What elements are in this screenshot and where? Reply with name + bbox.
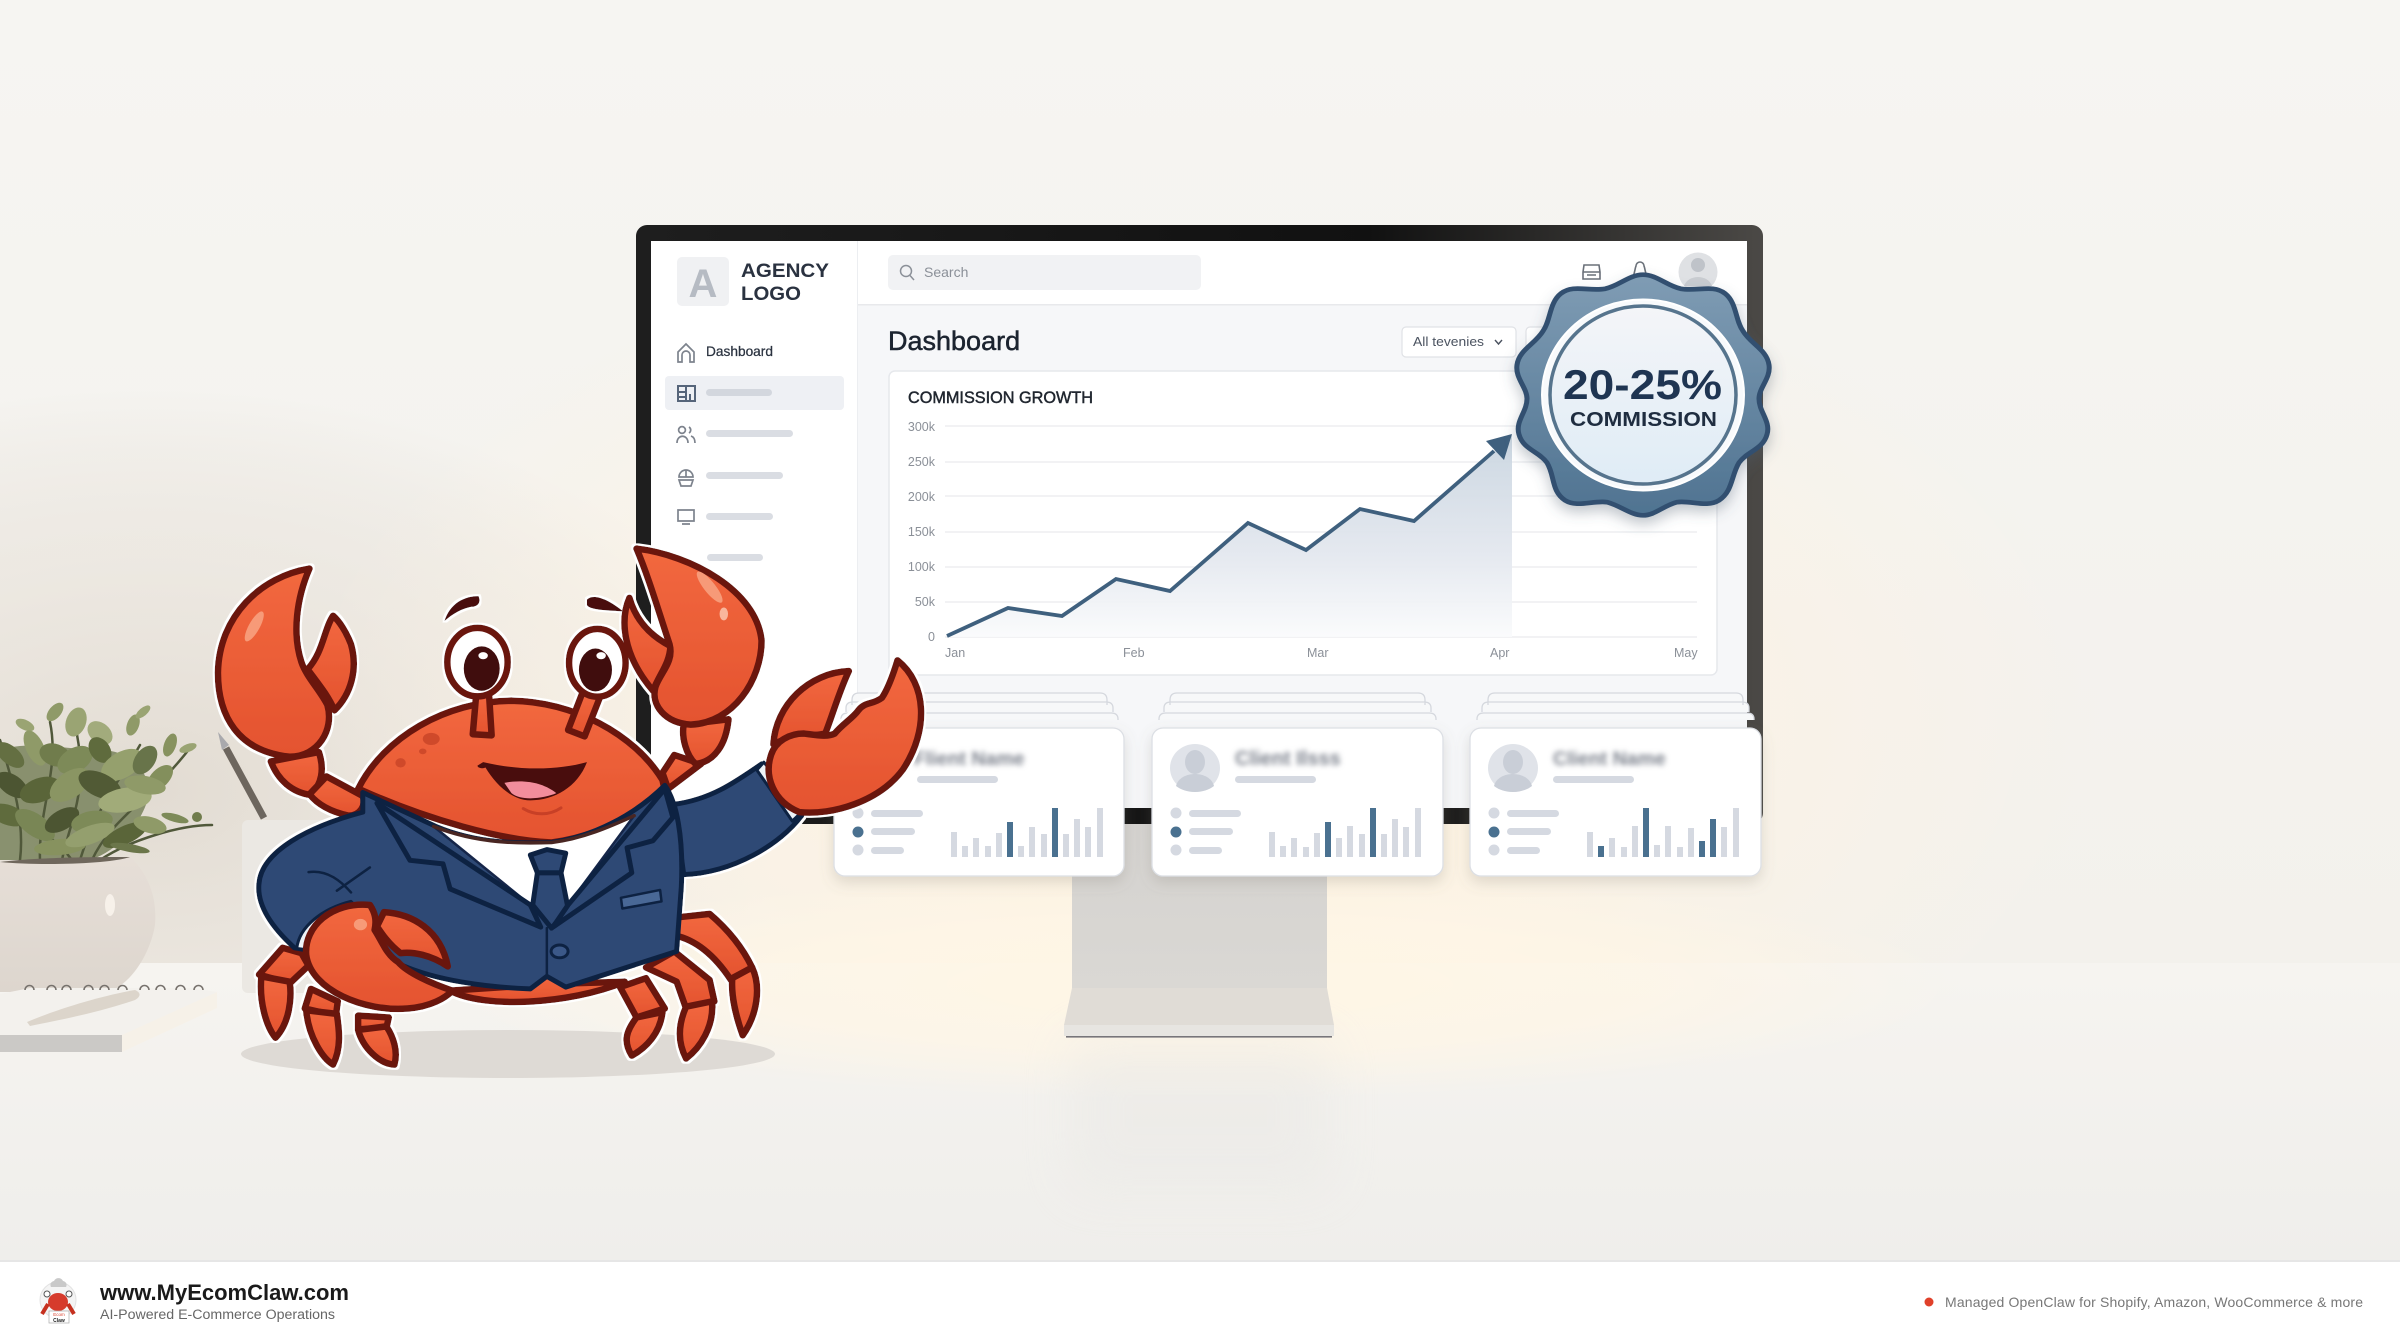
client stats list [1488, 808, 1559, 856]
plant stems [0, 722, 212, 860]
commission badge [1517, 275, 1769, 515]
search box [888, 255, 1201, 290]
icon: bell [1633, 262, 1647, 277]
crab front claw [297, 901, 452, 1009]
crab eyebrows [444, 596, 623, 621]
client name (blurred): Client Ilsss [1235, 748, 1341, 770]
crab left eye [447, 628, 508, 696]
client name (blurred): Client Name [1553, 748, 1666, 770]
client bar chart [951, 808, 1103, 857]
client bar chart [1587, 808, 1739, 857]
crab shell [358, 701, 665, 842]
growth line [947, 451, 1494, 636]
x axis labels: Mar [1307, 646, 1329, 660]
plant in pot [0, 700, 212, 992]
avatar [1678, 252, 1718, 292]
crab mascot [218, 549, 921, 1065]
footer logo [40, 1278, 76, 1324]
y axis labels: 150k [908, 525, 936, 539]
y axis labels: 0 [928, 630, 935, 644]
footer note: Managed OpenClaw for Shopify, Amazon, WooCommerce & more [1945, 1294, 2363, 1310]
crab mouth [477, 762, 587, 814]
sidebar [651, 241, 858, 808]
x axis labels: Jan [945, 646, 965, 660]
footer bar [0, 1260, 2400, 1340]
y axis labels: 250k [908, 455, 936, 469]
plant foliage mass [0, 746, 150, 860]
nav: reports [679, 470, 783, 486]
crab lapels [377, 803, 541, 927]
heading: dashboard: Dashboard [888, 326, 1020, 356]
y axis labels: 50k [915, 595, 936, 609]
filter dropdown [1402, 327, 1516, 357]
arrow head [1486, 434, 1512, 460]
y axis labels: 200k [908, 490, 936, 504]
plant leaves [0, 700, 202, 857]
agency logo: AGENCY [741, 260, 829, 282]
badge value: 20-25% [1563, 361, 1722, 408]
agency logo: LOGO [741, 283, 801, 305]
footer logo: Claw [53, 1318, 65, 1324]
crab button [551, 945, 568, 958]
x axis labels: May [1674, 646, 1698, 660]
footer red dot [1924, 1298, 1934, 1306]
y axis labels [908, 420, 936, 644]
x axis labels [945, 646, 1698, 660]
client card 3 [1470, 693, 1761, 876]
pen holder with pen [218, 732, 347, 993]
client avatar [1170, 744, 1220, 792]
plant pot [0, 857, 155, 992]
search box: Search [924, 264, 968, 280]
crab shell spots [395, 733, 440, 767]
scalloped seal [1517, 275, 1769, 515]
crab eye stalks [473, 691, 601, 736]
background: desk [0, 870, 2400, 1261]
x axis labels: Apr [1490, 646, 1509, 660]
nav: display [678, 510, 773, 524]
client card 1 [834, 693, 1124, 876]
crab jacket [259, 762, 802, 989]
crab pocket [621, 890, 662, 909]
agency logo: A [689, 262, 717, 306]
crab left raised claw [218, 569, 364, 816]
pen [226, 748, 264, 818]
client stats list [852, 808, 923, 856]
nav: placeholder [707, 554, 763, 561]
crab shirt and collar [434, 816, 634, 905]
chart panel: commission growth [889, 371, 1717, 675]
client avatar [1488, 744, 1538, 792]
gridlines [945, 426, 1697, 637]
screen [651, 241, 1747, 808]
client card 2 [1152, 693, 1443, 876]
footer logo: Ecom [53, 1312, 65, 1317]
footer website: www.MyEcomClaw.com [99, 1280, 349, 1305]
footer tagline: AI-Powered E-Commerce Operations [100, 1307, 335, 1323]
nav: active item [665, 376, 844, 410]
area fill [947, 435, 1512, 637]
x axis labels: Feb [1123, 646, 1145, 660]
crab legs [259, 914, 757, 1065]
monitor stand [1064, 820, 1334, 1038]
chart title: COMMISSION GROWTH [908, 389, 1093, 407]
filter dropdown: All tevenies [1413, 334, 1484, 349]
badge label: COMMISSION [1570, 409, 1717, 431]
nav: dashboard [678, 344, 773, 362]
header bar [858, 241, 1747, 306]
crab right raised claw [625, 549, 762, 789]
notebook with stylus [0, 986, 217, 1052]
crab body strip below jacket [450, 975, 625, 1002]
badge face [1542, 300, 1744, 490]
client bar chart [1269, 808, 1421, 857]
nav: dashboard: Dashboard [706, 344, 773, 359]
agency logo [677, 257, 829, 306]
y axis labels: 100k [908, 560, 936, 574]
y axis labels: 300k [908, 420, 936, 434]
crab ground shadow [241, 1030, 775, 1078]
crab waving claw [769, 660, 921, 813]
client stats list [1170, 808, 1241, 856]
client name (blurred): Flient Name [914, 748, 1025, 770]
nav: clients [677, 427, 793, 443]
icon: store [1583, 265, 1600, 279]
crab right eye [569, 629, 626, 697]
monitor [636, 225, 1763, 824]
crab tie [530, 850, 568, 928]
